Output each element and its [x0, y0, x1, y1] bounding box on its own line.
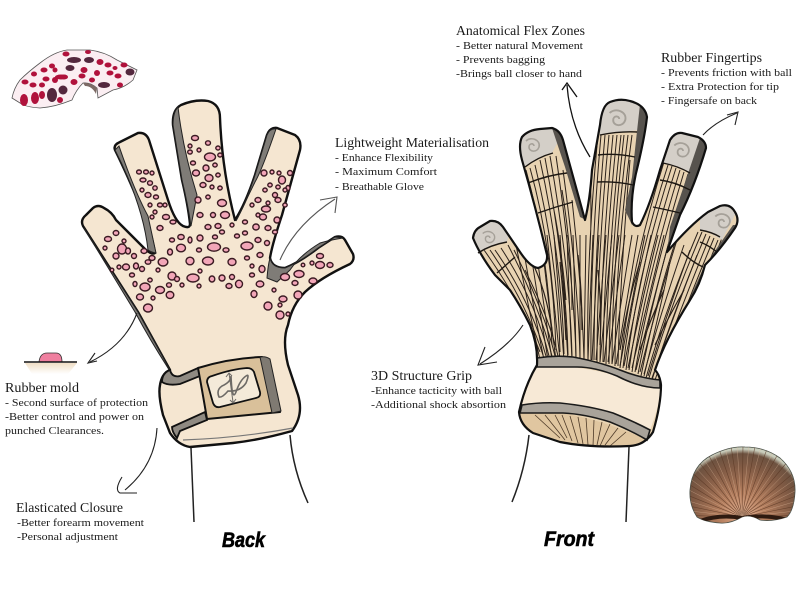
text: lightweight materialisation: - Enhance Flexibility — [335, 152, 434, 164]
text: elasticated closure: -Personal adjustment — [17, 531, 118, 543]
text: 3D structure grip: -Additional shock absortion — [371, 399, 507, 411]
rubber bubbles — [103, 136, 333, 319]
text: anatomical flex zones — [456, 23, 585, 80]
arrow: fingertips — [703, 112, 738, 135]
rubber fingertip panels — [474, 101, 735, 250]
front glove outline — [473, 100, 738, 446]
text: rubber mold: punched Clearances. — [5, 425, 104, 437]
gray side strips — [84, 107, 343, 370]
text: elasticated closure: Elasticated Closure — [16, 500, 123, 515]
text: rubber mold: - Second surface of protection — [5, 397, 149, 409]
logo patch — [207, 368, 260, 407]
text: rubber fingertips — [661, 50, 792, 107]
text: elasticated closure — [16, 500, 144, 543]
cuff lower fold line — [183, 428, 293, 440]
front glove body — [473, 100, 738, 446]
text: elasticated closure: -Better forearm movement — [17, 517, 144, 529]
icon: rubber mold cross-section — [24, 353, 77, 374]
text: rubber fingertips: - Fingersafe on back — [661, 95, 758, 107]
text: lightweight materialisation — [335, 135, 489, 193]
text: lightweight materialisation: - Breathable Glove — [335, 181, 424, 193]
back glove body — [82, 100, 354, 447]
text: rubber mold: -Better control and power on — [5, 411, 145, 423]
front cuff underside — [520, 413, 647, 446]
front cuff beige — [520, 366, 660, 430]
gray wrist bands — [162, 368, 207, 438]
closure tab — [198, 357, 280, 419]
text: lightweight materialisation: - Maximum Comfort — [335, 166, 437, 178]
arrow: lightweight — [280, 197, 337, 260]
text: rubber mold: Rubber mold — [5, 380, 79, 395]
label: front: Front — [544, 528, 595, 551]
text: rubber fingertips: Rubber Fingertips — [661, 50, 762, 65]
label: back: Back — [222, 529, 266, 552]
text: anatomical flex zones: Anatomical Flex Zones — [456, 23, 585, 38]
arrow: flex zones — [562, 83, 590, 157]
text: 3D structure grip: 3D Structure Grip — [371, 368, 472, 383]
text: rubber fingertips: - Extra Protection for tip — [661, 81, 780, 93]
wrist lines front — [512, 435, 629, 522]
text: anatomical flex zones: - Prevents bagging — [456, 54, 546, 66]
image: pink spotted mushroom — [12, 50, 137, 108]
closure tab stripe — [260, 357, 281, 413]
arrow: rubber mold — [88, 313, 137, 363]
text: anatomical flex zones: -Brings ball closer to hand — [456, 68, 583, 80]
text: 3D structure grip: -Enhance tacticity with ball — [371, 385, 502, 397]
panel: back glove — [82, 100, 354, 522]
arrow: elasticated — [117, 428, 157, 493]
arrow: 3D grip — [478, 325, 523, 365]
text: lightweight materialisation: Lightweight Materialisation — [335, 135, 489, 150]
text: 3D structure grip — [371, 368, 507, 411]
finger segment lines — [478, 132, 720, 273]
wrist lines back — [191, 435, 308, 522]
gray cuff bands front — [520, 356, 660, 440]
grip texture lines — [484, 135, 726, 386]
fingerprint spirals — [483, 110, 730, 243]
panel: front glove — [465, 95, 745, 522]
text: rubber fingertips: - Prevents friction with ball — [661, 67, 792, 79]
image: brown gilled mushroom — [690, 446, 796, 524]
text: anatomical flex zones: - Better natural Movement — [456, 40, 583, 52]
dark finger side strips — [552, 104, 742, 372]
text: rubber mold — [5, 380, 149, 437]
